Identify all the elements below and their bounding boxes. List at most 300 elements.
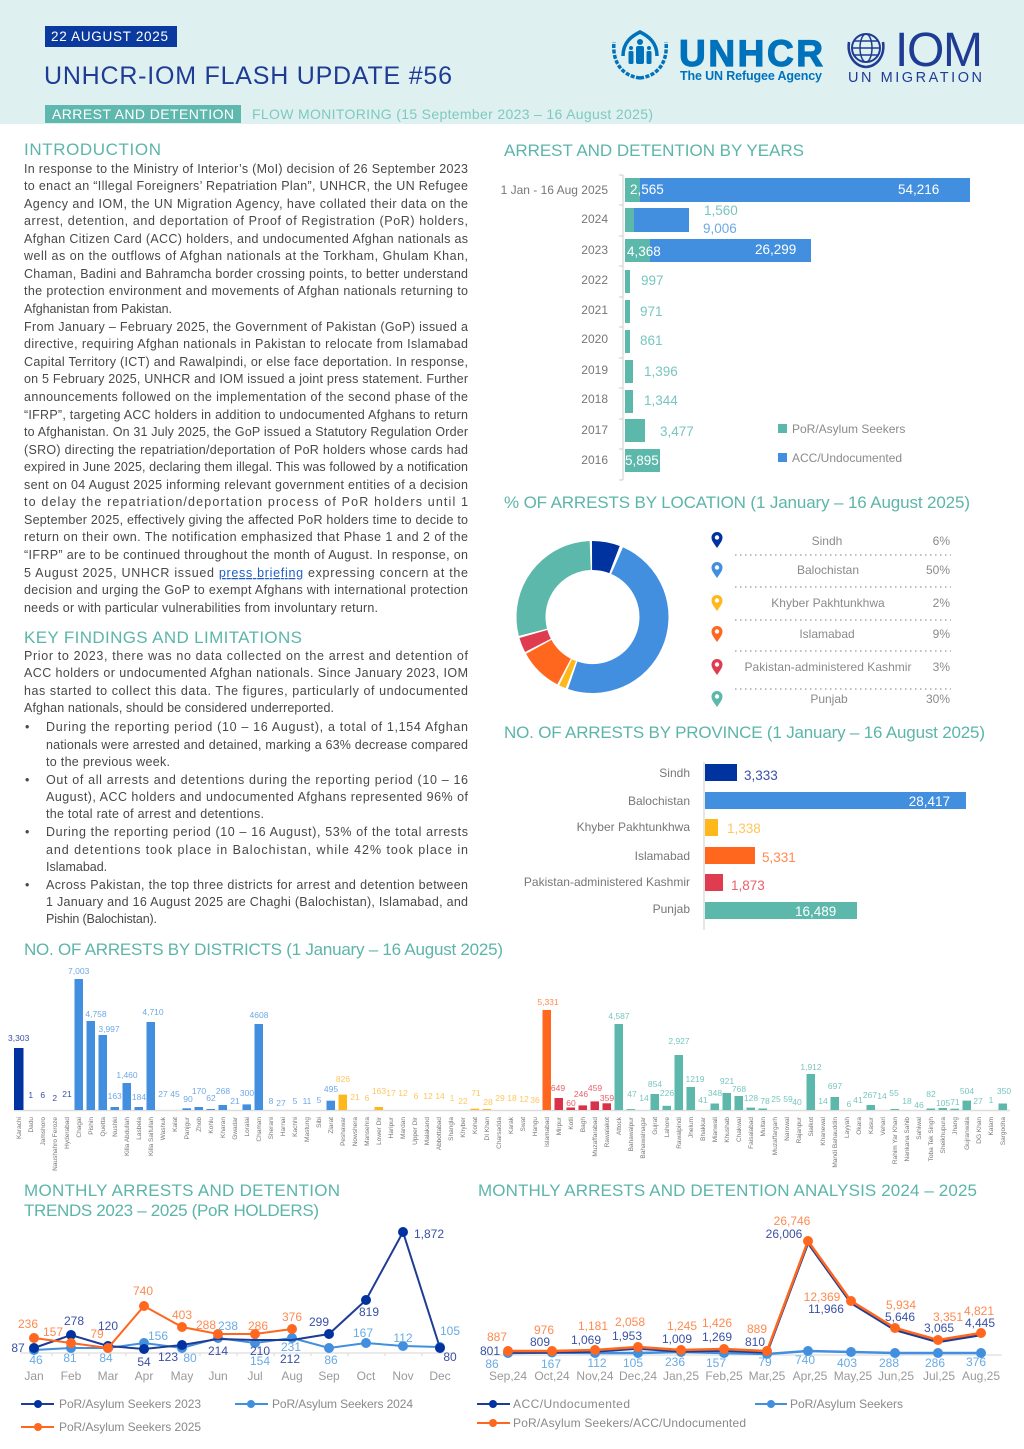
district names: Dadu [28, 1117, 35, 1133]
value labels: districts: 2,927 [668, 1036, 690, 1046]
district names: Mardan [400, 1117, 407, 1139]
data labels: 4,821 [964, 1304, 994, 1318]
value labels: districts: 184 [132, 1092, 146, 1102]
district names: Abbottabad [436, 1117, 443, 1150]
title: UNHCR-IOM FLASH UPDATE #56 [44, 62, 452, 90]
district names: Chaman [256, 1117, 263, 1142]
district names: Shangla [448, 1117, 455, 1141]
value labels: districts: 2 [52, 1093, 57, 1103]
chart: arrests by province: Khyber Pakhtunkhwa [577, 820, 690, 834]
data labels: 4,445 [965, 1316, 995, 1330]
district names: Hyderabad [64, 1117, 71, 1149]
chart: arrests by province: Balochistan [628, 794, 690, 808]
district names: Layyah [844, 1117, 851, 1138]
district names: Panjgur [184, 1116, 191, 1139]
value labels: districts: 5 [317, 1095, 322, 1105]
text block: introduction: Agency and IOM, the UN Migration Agency, have collated their data on the [24, 197, 468, 211]
data labels: 167 [541, 1357, 561, 1371]
value labels: districts: 6 [365, 1093, 370, 1103]
heading: arrest and detention by years: ARREST AND DETENTION BY YEARS [504, 141, 804, 160]
value labels: districts: 459 [588, 1083, 602, 1093]
text block: key findings: During the reporting period (10 – 16 August), a total of 1,154 Afghan [46, 720, 468, 734]
district names: Bagh [580, 1117, 587, 1132]
district names: Gwadar [232, 1116, 239, 1140]
chart: arrests by years: 2,565 [630, 182, 664, 197]
month axis: Nov,24 [576, 1369, 614, 1383]
data labels: 84 [99, 1351, 113, 1365]
month axis [24, 1369, 451, 1383]
district names: Killa Saifullah [148, 1117, 155, 1156]
data labels: 86 [485, 1357, 499, 1371]
chart: arrests by years: 1 Jan - 16 Aug 2025 [501, 183, 608, 197]
district names: Malakand [424, 1117, 431, 1145]
value labels: districts: 8 [269, 1096, 274, 1106]
district names: Sialkot [808, 1117, 815, 1137]
month axis: Aug [281, 1369, 303, 1383]
text block: introduction: “IFRP”, targeting ACC holders in addition to undocumented Afghans to return [24, 408, 468, 422]
data labels: 1,269 [702, 1330, 732, 1344]
value labels: districts: 22 [458, 1096, 468, 1106]
text block: introduction: In response to the Ministry of Interior’s (MoI) decision of 26 September 2023 [24, 162, 468, 176]
logo: UNHCR: UNHCR [679, 33, 823, 74]
district names: Muzaffarabad [592, 1117, 599, 1157]
data labels: 80 [183, 1351, 197, 1365]
value labels: districts: 62 [206, 1093, 216, 1103]
district names: Charsadda [496, 1117, 503, 1149]
chart: arrests by province: Sindh [659, 766, 690, 780]
chart: arrests by province: 1,338 [727, 821, 761, 836]
text block: introduction: September 2025, effectively giving the affected PoR holders time to decide to [24, 513, 468, 527]
chart: arrests by years: 26,299 [755, 242, 796, 257]
value labels: districts: 1 [450, 1093, 455, 1103]
text block: key findings: Out of all arrests and detentions during the reporting period (10 – 16 [46, 773, 468, 787]
district names: Attock [616, 1116, 623, 1135]
data labels: 12,369 [804, 1290, 841, 1304]
value labels: districts: 4,758 [85, 1009, 107, 1019]
data labels [480, 1214, 995, 1371]
data labels: 46 [29, 1353, 43, 1367]
district names: Jhang [952, 1117, 959, 1135]
value labels: districts: 649 [551, 1083, 565, 1093]
data labels: 105 [623, 1356, 643, 1370]
bars: districts [14, 979, 1007, 1110]
chart: arrests by years: 2016 [581, 453, 608, 467]
data labels [11, 1227, 460, 1369]
donut legend: Punjab [810, 692, 848, 706]
data labels: 299 [309, 1315, 329, 1329]
district names: Sargodha [1000, 1117, 1007, 1145]
text block: key findings: ACC holders or undocumented Afghan nationals. Since January 2023, IOM [24, 666, 468, 680]
value labels: districts: 697 [828, 1081, 842, 1091]
value labels: districts: 28 [483, 1097, 493, 1107]
chart: arrests by years: 3,477 [660, 424, 694, 439]
month axis: Jun [208, 1369, 228, 1383]
text block: key findings: to the previous week. [46, 755, 170, 769]
value labels: districts: 3,997 [98, 1024, 120, 1034]
value labels: districts: 170 [192, 1086, 206, 1096]
date badge: 22 AUGUST 2025 [51, 29, 168, 44]
data labels: 214 [208, 1344, 228, 1358]
logo: IOM: UN MIGRATION [848, 70, 982, 86]
chart: arrests by years: 1,344 [644, 393, 678, 408]
value labels: districts: 90 [183, 1094, 193, 1104]
donut legend: 2% [933, 596, 950, 610]
text block: key findings: Islamabad. [46, 860, 107, 874]
value labels: districts: 359 [600, 1093, 614, 1103]
value labels: districts: 226 [660, 1088, 674, 1098]
district names: Harnai [280, 1117, 287, 1136]
value labels: districts: 5 [293, 1096, 298, 1106]
value labels: districts: 60 [566, 1098, 576, 1108]
line chart: monthly PoR trends [11, 1227, 460, 1434]
value labels: districts: 504 [960, 1086, 974, 1096]
month axis: Oct [357, 1369, 376, 1383]
data labels: 1,009 [662, 1332, 692, 1346]
month axis: Oct,24 [534, 1369, 570, 1383]
value labels: districts: 12 [398, 1088, 408, 1098]
value labels: districts: 82 [926, 1089, 936, 1099]
district names: Mirpur [556, 1116, 563, 1135]
icon: pin Punjab [712, 691, 722, 707]
value labels: districts: 163 [108, 1091, 122, 1101]
heading: monthly analysis: MONTHLY ARRESTS AND DETENTION ANALYSIS 2024 – 2025 [478, 1181, 977, 1200]
value labels: districts: 4,587 [608, 1011, 630, 1021]
chart: arrests by years: 971 [640, 304, 663, 319]
logo: IOM [848, 24, 983, 86]
value labels: districts: 267 [863, 1090, 877, 1100]
text block: key findings: has started to collect this data. The figures, particularly of undocumented [24, 684, 468, 698]
chart: arrests by years: 2019 [581, 363, 608, 377]
data labels: 123 [158, 1350, 178, 1364]
value labels: districts: 5,331 [537, 997, 559, 1007]
text block: introduction: on 5 February 2025, UNHCR and IOM issued a joint press statement. Further [24, 372, 468, 386]
value labels: districts: 1,912 [800, 1062, 822, 1072]
chart: arrests by province: 5,331 [762, 850, 796, 865]
donut legend: Khyber Pakhtunkhwa [771, 596, 885, 610]
data labels: 154 [250, 1354, 270, 1368]
heading: monthly trends: MONTHLY ARRESTS AND DETENTION [24, 1181, 340, 1200]
series: 2023 [29, 1227, 445, 1354]
data labels: 212 [280, 1352, 300, 1366]
district names: Muzaffargarh [772, 1117, 779, 1155]
value labels: districts: 21 [230, 1096, 240, 1106]
value labels: districts: 11 [303, 1096, 312, 1106]
value labels: districts: 25 [771, 1094, 781, 1104]
chart: arrests by years: 861 [640, 333, 663, 348]
donut legend [712, 532, 951, 707]
value labels: districts: 854 [648, 1079, 662, 1089]
value labels: districts: 246 [574, 1089, 588, 1099]
data labels: 81 [63, 1351, 77, 1365]
data labels: 5,934 [886, 1298, 916, 1312]
value labels: districts: 14 [639, 1093, 649, 1103]
month axis: Mar,25 [749, 1369, 786, 1383]
data labels: 87 [11, 1341, 25, 1355]
donut legend: 3% [933, 660, 950, 674]
data labels: 889 [747, 1322, 767, 1336]
month axis: Jun,25 [878, 1369, 914, 1383]
month axis: Jan,25 [663, 1369, 699, 1383]
legend: years chart: PoR/Asylum Seekers [792, 422, 905, 436]
date badge [45, 26, 177, 47]
district names: Kachhi [292, 1117, 299, 1137]
data labels: 26,746 [774, 1214, 811, 1228]
data labels: 236 [18, 1317, 38, 1331]
month axis: Feb,25 [705, 1369, 743, 1383]
district names: Sheikhupura [940, 1117, 947, 1154]
value labels: districts: 495 [324, 1084, 338, 1094]
data labels: 376 [966, 1355, 986, 1369]
icon: pin Khyber Pakhtunkhwa [712, 595, 722, 611]
heading: monthly trends [24, 1181, 340, 1220]
district names: Haripur [388, 1116, 395, 1138]
legend: monthly analysis: PoR/Asylum Seekers [790, 1397, 903, 1411]
value labels: districts: 12 [519, 1094, 529, 1104]
value labels: districts: 14 [877, 1091, 887, 1101]
district names: Quetta [100, 1117, 107, 1137]
value labels: districts: 921 [720, 1076, 734, 1086]
data labels: 236 [665, 1355, 685, 1369]
month axis [489, 1369, 1000, 1383]
chart: arrests by province: 16,489 [795, 904, 836, 919]
value labels: districts: 768 [732, 1084, 746, 1094]
district names: Multan [760, 1117, 767, 1137]
district names: DG Khan [976, 1117, 983, 1144]
data labels: 2,058 [615, 1315, 645, 1329]
month axis: Jul [247, 1369, 263, 1383]
value labels: districts: 78 [760, 1096, 770, 1106]
data labels: 740 [795, 1353, 815, 1367]
month axis: May [171, 1369, 193, 1383]
data labels: 3,065 [924, 1321, 954, 1335]
heading: key findings: KEY FINDINGS AND LIMITATIONS [24, 628, 302, 647]
value labels: districts: 1219 [686, 1074, 705, 1084]
value labels: districts: 40 [792, 1097, 802, 1107]
chart: arrests by province: 1,873 [731, 878, 765, 893]
district names: Mianwali [712, 1117, 719, 1142]
value labels: districts: 18 [507, 1093, 517, 1103]
data labels: 26,006 [766, 1227, 803, 1241]
legend: monthly analysis: ACC/Undocumented [513, 1397, 630, 1411]
value labels: districts: 71 [950, 1097, 960, 1107]
chart: arrests by province: 28,417 [909, 794, 950, 809]
value labels: districts: 826 [336, 1074, 350, 1084]
heading: arrests by province: NO. OF ARRESTS BY PROVINCE (1 January – 16 August 2025) [504, 723, 985, 742]
data labels: 403 [172, 1308, 192, 1322]
data labels: 740 [133, 1284, 153, 1298]
donut legend: 9% [933, 627, 950, 641]
value labels: districts: 21 [350, 1092, 360, 1102]
logo: UNHCR: The UN Refugee Agency [680, 69, 822, 83]
data labels: 809 [530, 1335, 550, 1349]
value labels: districts: 163 [372, 1086, 386, 1096]
heading: arrests by districts: NO. OF ARRESTS BY DISTRICTS (1 January – 16 August 2025) [24, 940, 503, 959]
heading: arrests by location: % OF ARRESTS BY LOCATION (1 January – 16 August 2025) [504, 493, 970, 512]
data labels: 819 [359, 1305, 379, 1319]
district names: Khyber [460, 1116, 467, 1138]
district names: Rajanpur [796, 1116, 803, 1143]
data labels: 278 [64, 1314, 84, 1328]
icon: pin Islamabad [712, 626, 722, 642]
month axis: Dec [429, 1369, 451, 1383]
value labels: districts: 27 [158, 1089, 168, 1099]
chart: arrests by years: 2022 [581, 273, 608, 287]
district names: Zhob [196, 1117, 203, 1132]
value labels: districts: 18 [902, 1096, 912, 1106]
series: total [503, 1236, 986, 1356]
series: 2024 [29, 1333, 445, 1355]
district names: Chagai [76, 1117, 83, 1138]
text block: key findings: • [25, 878, 29, 892]
value labels: districts: 1,460 [116, 1070, 138, 1080]
text block: key findings: • [25, 720, 29, 734]
text block: introduction [23, 162, 468, 615]
district names: Sibi [316, 1117, 323, 1128]
text block: introduction: to enact an “Illegal Foreigners’ Repatriation Plan”, UNHCR, the UN Refugee [24, 179, 468, 193]
month axis: Nov [392, 1369, 414, 1383]
data labels: 1,426 [702, 1316, 732, 1330]
district names: Nowshera [352, 1117, 359, 1146]
data labels: 403 [837, 1356, 857, 1370]
data labels: 112 [587, 1356, 607, 1370]
text block: introduction: From January – February 2025, the Government of Pakistan (GoP) issued a [24, 320, 468, 334]
district names: Kohat [472, 1117, 479, 1134]
chart: arrests by years: 54,216 [898, 182, 939, 197]
data labels: 1,069 [571, 1333, 601, 1347]
data labels: 156 [148, 1329, 168, 1343]
value labels: districts: 6 [847, 1099, 852, 1109]
header band [0, 0, 1024, 124]
data labels: 238 [218, 1319, 238, 1333]
district names: Gujrat [652, 1117, 659, 1135]
chart: arrests by years: 5,895 [625, 453, 659, 468]
text block: introduction: to Afghanistan. On 31 July 2025, the GoP issued a Statutory Regulation Order [24, 425, 468, 439]
text block: introduction: sent on 04 August 2025 informing relevant government entities of a decision [24, 478, 468, 492]
text block: introduction: well as on the outflows of Afghan nationals at the Torkham, Ghulam Khan, [23, 249, 468, 263]
chart: arrests by province: 3,333 [744, 768, 778, 783]
chart: arrests by province: Islamabad [635, 849, 690, 863]
data labels: 79 [758, 1355, 772, 1369]
district names: Vehari [880, 1117, 887, 1135]
chart: arrests by years: 2020 [581, 332, 608, 346]
value labels: districts: 71 [471, 1088, 481, 1098]
district names: Kohlu [208, 1117, 215, 1134]
month axis: Sep,24 [489, 1369, 527, 1383]
month axis: Mar [98, 1369, 118, 1383]
district names: Nankana Sahib [904, 1117, 911, 1161]
value labels: districts: 6 [40, 1090, 45, 1100]
chart: arrests by years: 1,396 [644, 364, 678, 379]
district names: Kalat [172, 1117, 179, 1132]
district names: Rahim Yar Khan [892, 1117, 899, 1164]
value labels: districts: 36 [530, 1095, 540, 1105]
value labels: districts: 1 [989, 1095, 994, 1105]
text block: key findings [24, 649, 469, 926]
district names: Khushab [724, 1117, 731, 1143]
month axis: Sep [318, 1369, 340, 1383]
value labels: districts [8, 966, 1011, 1110]
month axis: Aug,25 [962, 1369, 1000, 1383]
chart: arrests by province: Punjab [653, 902, 690, 916]
subheader tag: ARREST AND DETENTION [52, 106, 234, 122]
district names: Gujranwala [964, 1117, 971, 1150]
heading: introduction: INTRODUCTION [24, 140, 161, 159]
value labels: districts: 27 [973, 1096, 983, 1106]
text block: key findings: 1 January and 16 August 2025 are Chaghi (Balochistan), Islamabad, and [46, 895, 468, 909]
district names: Bahawalpur [628, 1116, 635, 1151]
value labels: districts: 4608 [250, 1010, 269, 1020]
district names: DI Khan [484, 1117, 491, 1140]
district names: Jamshoro [40, 1117, 47, 1146]
text block: key findings: the total rate of arrest and detentions. [46, 807, 264, 821]
chart: arrests by years: 2024 [581, 212, 608, 226]
data labels: 801 [480, 1344, 500, 1358]
district names: Hangu [532, 1117, 539, 1136]
value labels: districts: 41 [853, 1095, 863, 1105]
data labels: 79 [90, 1327, 104, 1341]
icon: pin Sindh [712, 532, 722, 548]
donut legend: 30% [926, 692, 950, 706]
chart: arrests by years: 4,368 [627, 244, 661, 259]
district names: Karachi [16, 1117, 23, 1139]
value labels: districts: 348 [708, 1088, 722, 1098]
district names: Jhelum [688, 1117, 695, 1138]
value labels: districts: 105 [936, 1098, 950, 1108]
donut legend: Pakistan-administered Kashmir [744, 660, 912, 674]
data labels: 286 [248, 1319, 268, 1333]
data labels: 157 [43, 1325, 63, 1339]
data labels: 80 [443, 1350, 457, 1364]
chart: arrests by years: 9,006 [703, 221, 737, 236]
text block: introduction: decision and urging the GoP to exempt Afghans with international protection [24, 583, 468, 597]
district names: Swat [520, 1117, 527, 1131]
chart: arrests by years: 2021 [581, 303, 608, 317]
data labels: 288 [879, 1356, 899, 1370]
value labels: districts: 55 [889, 1088, 899, 1098]
line chart: monthly analysis [477, 1214, 1002, 1430]
district names: Kasur [868, 1116, 875, 1134]
text block: key findings: Pishin (Balochistan). [46, 912, 157, 926]
donut legend: Sindh [812, 534, 842, 548]
district names: Kotli [568, 1117, 575, 1130]
district names: Khanewal [820, 1116, 827, 1146]
district names: Narowal [784, 1116, 791, 1141]
chart: arrests by years: 2017 [581, 423, 608, 437]
chart: arrests by years [501, 175, 970, 480]
data labels: 157 [706, 1356, 726, 1370]
district names: Kalam [988, 1117, 995, 1135]
value labels: districts: 6 [414, 1091, 419, 1101]
value labels: districts: 12 [423, 1091, 433, 1101]
district names: Mandi Bahauddin [832, 1117, 839, 1168]
district names: Karak [508, 1116, 515, 1134]
value labels: districts: 17 [386, 1088, 396, 1098]
chart: arrests by years: 2023 [581, 243, 608, 257]
data labels: 5,646 [885, 1310, 915, 1324]
text block: introduction: to delay the repatriation/deportation process of PoR holders until 1 [24, 495, 468, 509]
donut legend: Islamabad [799, 627, 855, 641]
month axis: Jul,25 [923, 1369, 955, 1383]
text block: introduction: directive, requiring Afghan nationals in Pakistan to relocate from Islamabad [24, 337, 468, 351]
month axis: Feb [61, 1369, 82, 1383]
district names [16, 1116, 1007, 1171]
value labels: districts: 47 [627, 1089, 637, 1099]
heading: monthly trends: TRENDS 2023 – 2025 (PoR HOLDERS) [24, 1201, 319, 1220]
text block: introduction: “IFRP” are to be continued throughout the month of August. In response, on [24, 548, 468, 562]
data labels: 3,351 [933, 1310, 963, 1324]
value labels: districts: 14 [818, 1096, 828, 1106]
legend: years chart: ACC/Undocumented [792, 451, 902, 465]
